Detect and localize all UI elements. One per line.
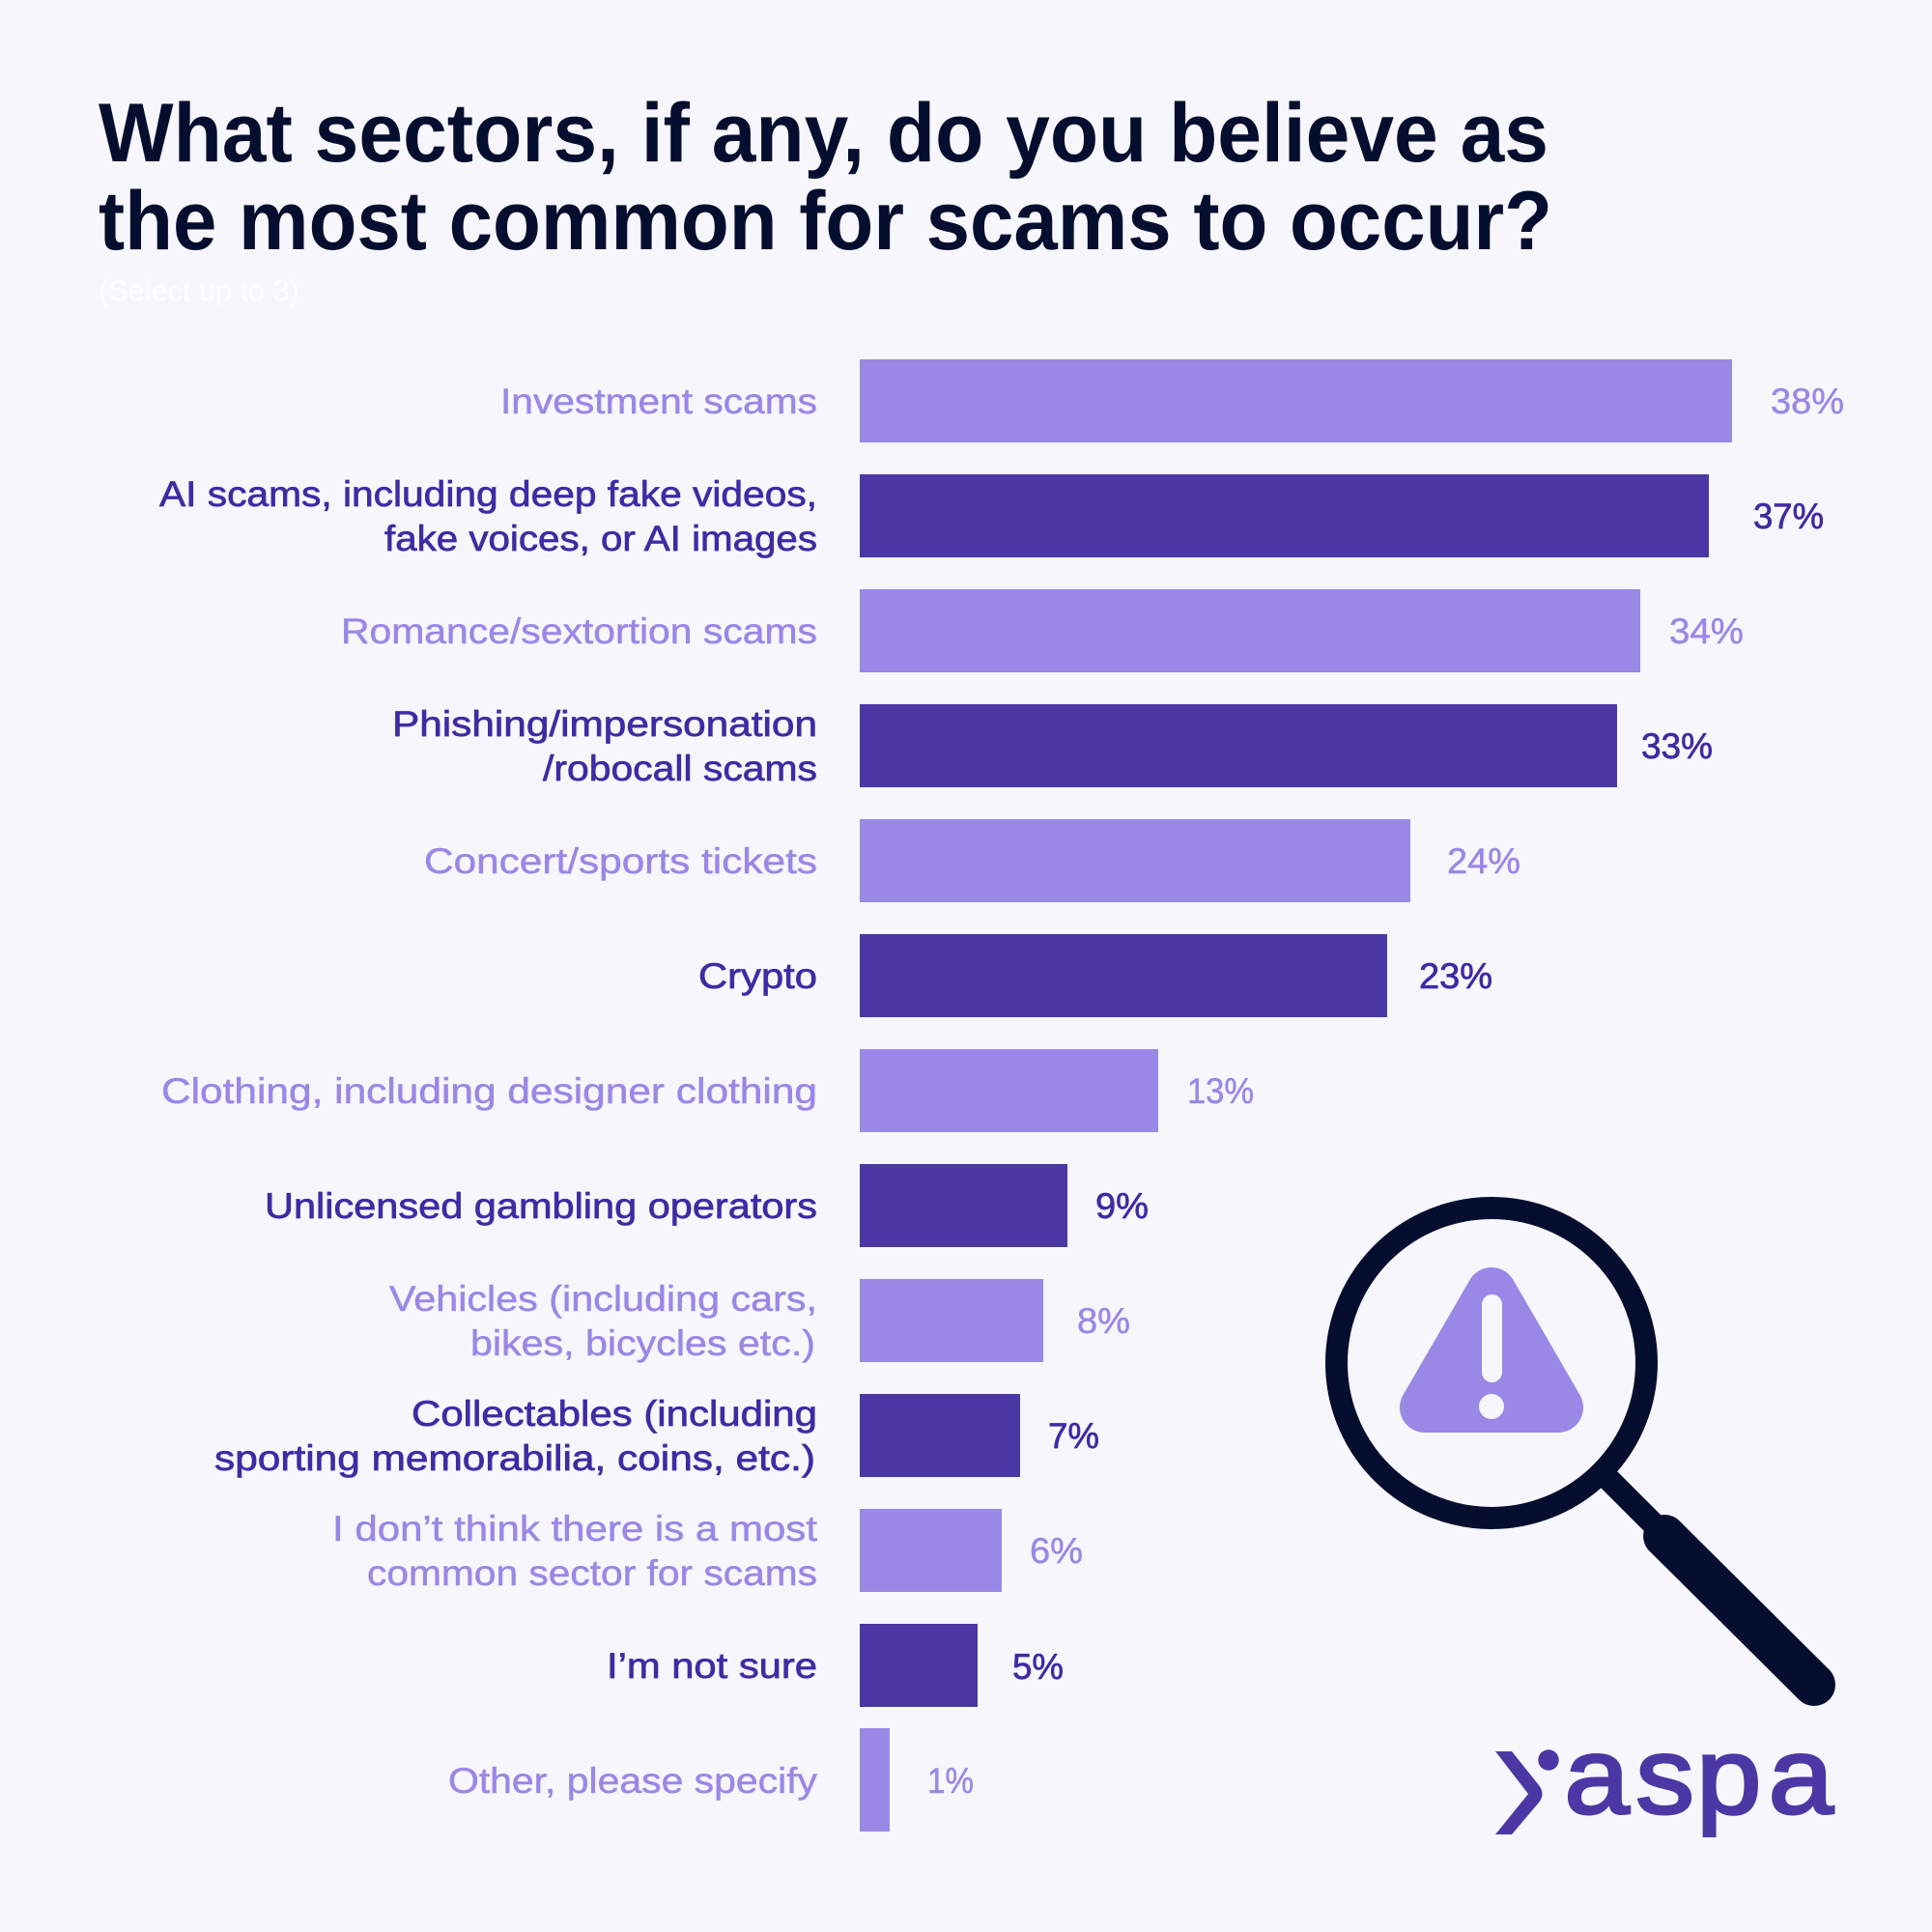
row: Other 1%: Other, please specify [448,1761,818,1801]
icon: warning triangle [1425,1293,1558,1419]
row: No most common sector 6% [332,1509,1083,1593]
row: Concert/sports tickets 24% [424,819,1520,902]
row: Phishing 33% [392,704,1713,788]
row: AI scams 37%: fake voices, or AI images [384,519,817,558]
logo wordmark: aspa [1564,1715,1833,1836]
row: Not sure 5% [607,1624,1064,1707]
logo mark: chevron and dot [1495,1749,1559,1834]
row: Vehicles 8%: Vehicles (including cars, [389,1279,817,1319]
row: Concert/sports tickets 24%: 24% [1447,841,1520,881]
row: No most common sector 6%: I don’t think there is a most [332,1509,818,1548]
row: AI scams 37% [159,474,1824,558]
title [99,87,1552,268]
row: Collectables 7%: sporting memorabilia, coins, etc.) [214,1438,815,1478]
icon: magnifier ring [1337,1208,1646,1519]
row: No most common sector 6%: common sector for scams [367,1553,817,1593]
row: Crypto 23%: Crypto [698,956,817,996]
row: Vehicles 8%: 8% [1077,1301,1130,1341]
row: Vehicles 8%: bikes, bicycles etc.) [470,1323,815,1363]
row: Phishing 33%: /robocall scams [543,749,817,788]
row: Investment scams 38% [500,359,1844,442]
icon: magnifier handle [1604,1474,1814,1685]
row: AI scams 37%: 37% [1753,497,1824,536]
row: Other 1%: 1% [927,1761,974,1801]
row: Unlicensed gambling operators 9%: Unlicensed gambling operators [265,1186,817,1226]
row: Clothing 13% [161,1049,1254,1132]
row: Collectables 7% [214,1394,1099,1478]
row: Investment scams 38%: 38% [1771,382,1844,421]
row: Investment scams 38%: Investment scams [500,382,817,421]
logo: yaspa [1495,1715,1833,1836]
subtitle: (Select up to 3) [99,275,299,307]
row: Concert/sports tickets 24%: Concert/sports tickets [424,841,817,881]
row: Unlicensed gambling operators 9% [265,1164,1149,1247]
row: Collectables 7%: 7% [1048,1416,1099,1456]
row: Crypto 23% [698,934,1492,1017]
row: Romance/sextortion scams 34%: Romance/sextortion scams [341,611,817,651]
title: the most common for scams to occur? [99,175,1552,268]
row: Romance/sextortion scams 34%: 34% [1669,611,1744,651]
row: Not sure 5%: I’m not sure [607,1646,817,1686]
row: Clothing 13%: Clothing, including designer clothing [161,1071,817,1111]
row: Other 1% [448,1728,974,1832]
row: Phishing 33%: Phishing/impersonation [392,704,817,744]
row: Collectables 7%: Collectables (including [412,1394,817,1434]
row: Romance/sextortion scams 34% [341,589,1744,672]
title: What sectors, if any, do you believe as [99,87,1548,180]
row: AI scams 37%: AI scams, including deep fake videos, [159,474,817,514]
row: Not sure 5%: 5% [1012,1647,1064,1687]
row: Clothing 13%: 13% [1187,1071,1254,1111]
bar chart [159,359,1844,1832]
row: No most common sector 6%: 6% [1030,1531,1083,1571]
row: Vehicles 8% [389,1279,1130,1363]
icon: magnifying glass with warning [1337,1208,1814,1685]
row: Unlicensed gambling operators 9%: 9% [1095,1186,1149,1226]
row: Phishing 33%: 33% [1641,726,1713,766]
row: Crypto 23%: 23% [1419,956,1492,996]
